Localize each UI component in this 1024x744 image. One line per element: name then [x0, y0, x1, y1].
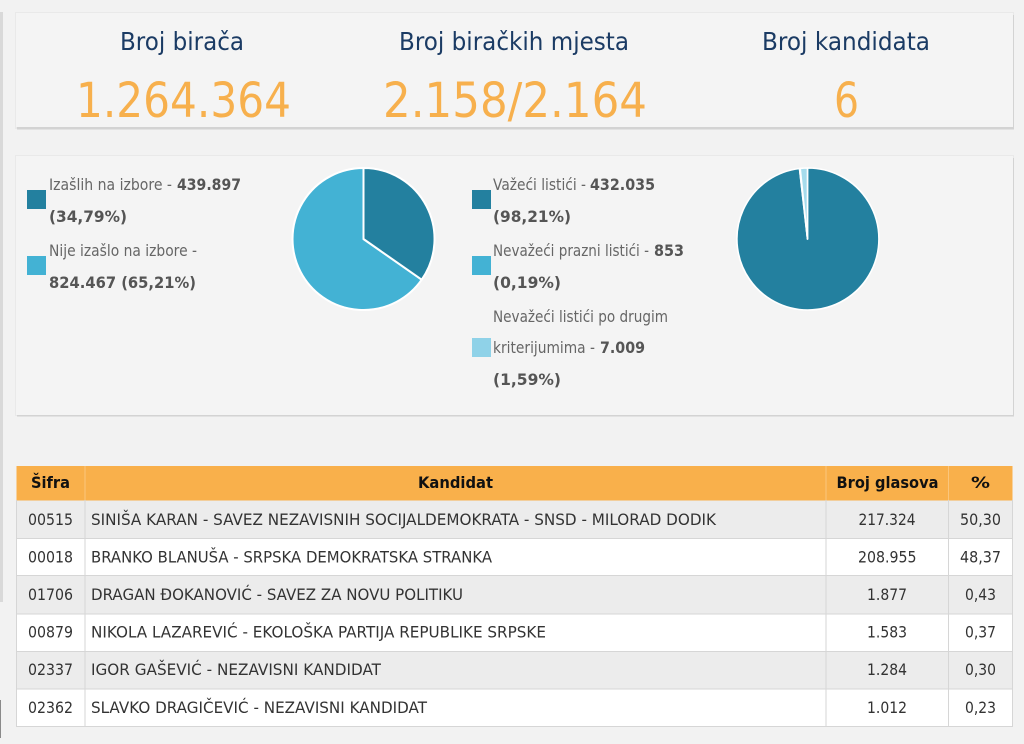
table header: Kandidat	[418, 473, 493, 492]
row: Igor Gašević: IGOR GAŠEVIĆ - NEZAVISNI KANDIDAT	[91, 660, 381, 679]
legend: ballots: kriterijumima -	[493, 338, 595, 357]
legend: ballots: Nevažeći listići po drugim	[493, 307, 668, 326]
row: Dragan Đokanović: 1.877	[867, 585, 907, 604]
row: Igor Gašević: 1.284	[867, 660, 907, 679]
row: Branko Blanuša	[28, 548, 1001, 566]
legend: turnout: 439.897	[177, 175, 241, 194]
row: Nikola Lazarević: 00879	[28, 622, 73, 642]
row: Branko Blanuša: 48,37	[960, 548, 1001, 566]
row: Nikola Lazarević: 1.583	[867, 622, 907, 642]
row: Branko Blanuša: 00018	[28, 548, 73, 566]
row: Slavko Dragičević: 0,23	[965, 698, 996, 717]
legend: turnout: 824.467 (65,21%)	[49, 273, 196, 292]
legend: ballots: 7.009	[600, 338, 645, 357]
row: Igor Gašević	[28, 660, 996, 679]
panel: summary statistics	[15, 12, 1014, 130]
pie chart: ballots	[737, 168, 879, 310]
legend: ballots: Nevažeći prazni listići -	[493, 241, 649, 260]
table header: Šifra	[31, 473, 70, 492]
legend: ballots: Važeći listići -	[493, 175, 586, 194]
row: Slavko Dragičević: SLAVKO DRAGIČEVIĆ - NEZAVISNI KANDIDAT	[91, 698, 427, 717]
row: Igor Gašević: 02337	[28, 660, 73, 679]
row: Siniša Karan: SINIŠA KARAN - SAVEZ NEZAVISNIH SOCIJALDEMOKRATA - SNSD - MILORAD DODIK	[91, 510, 716, 529]
legend: ballots: (0,19%)	[493, 273, 561, 292]
stat: number of candidates: Broj kandidata	[762, 27, 930, 56]
legend: ballots: (98,21%)	[493, 207, 571, 226]
stat: number of voters: Broj birača	[120, 27, 244, 56]
row: Branko Blanuša: BRANKO BLANUŠA - SRPSKA DEMOKRATSKA STRANKA	[91, 548, 492, 566]
legend: turnout: Nije izašlo na izbore -	[49, 241, 197, 260]
row: Nikola Lazarević	[28, 622, 996, 642]
row: Branko Blanuša: 208.955	[858, 548, 916, 566]
legend: ballots	[472, 175, 684, 389]
row: Dragan Đokanović	[28, 585, 996, 604]
stat: number of candidates: 6	[834, 73, 859, 129]
legend: turnout: (34,79%)	[49, 207, 127, 226]
row: Dragan Đokanović: 01706	[28, 585, 73, 604]
legend: turnout	[27, 175, 241, 292]
table header: %	[971, 473, 990, 492]
stat: number of candidates	[762, 27, 930, 129]
stat: number of voters: 1.264.364	[76, 73, 291, 129]
row: Slavko Dragičević	[28, 698, 996, 717]
row: Siniša Karan: 217.324	[858, 510, 916, 529]
row: Nikola Lazarević: 0,37	[965, 622, 996, 642]
results table	[16, 466, 1013, 727]
row: Siniša Karan: 50,30	[960, 510, 1001, 529]
panel: turnout and ballots charts	[15, 155, 1014, 416]
stat: number of polling stations	[383, 27, 647, 129]
row: Dragan Đokanović: 0,43	[965, 585, 996, 604]
legend: ballots: (1,59%)	[493, 370, 561, 389]
row: Nikola Lazarević: NIKOLA LAZAREVIĆ - EKOLOŠKA PARTIJA REPUBLIKE SRPSKE	[91, 622, 546, 642]
row: Siniša Karan	[28, 510, 1001, 529]
pie chart: turnout	[293, 168, 435, 310]
legend: ballots: 853	[654, 241, 684, 260]
row: Slavko Dragičević: 02362	[28, 698, 73, 717]
legend: turnout: Izašlih na izbore -	[49, 175, 172, 194]
row: Siniša Karan: 00515	[28, 510, 73, 529]
legend: ballots: 432.035	[590, 175, 655, 194]
row: Igor Gašević: 0,30	[965, 660, 996, 679]
row: Slavko Dragičević: 1.012	[867, 698, 907, 717]
table header	[16, 466, 1012, 500]
stat: number of polling stations: Broj biračkih mjesta	[399, 27, 629, 56]
row: Dragan Đokanović: DRAGAN ĐOKANOVIĆ - SAVEZ ZA NOVU POLITIKU	[91, 585, 463, 604]
stat: number of polling stations: 2.158/2.164	[383, 73, 647, 129]
stat: number of voters	[76, 27, 291, 129]
table header: Broj glasova	[836, 473, 938, 492]
